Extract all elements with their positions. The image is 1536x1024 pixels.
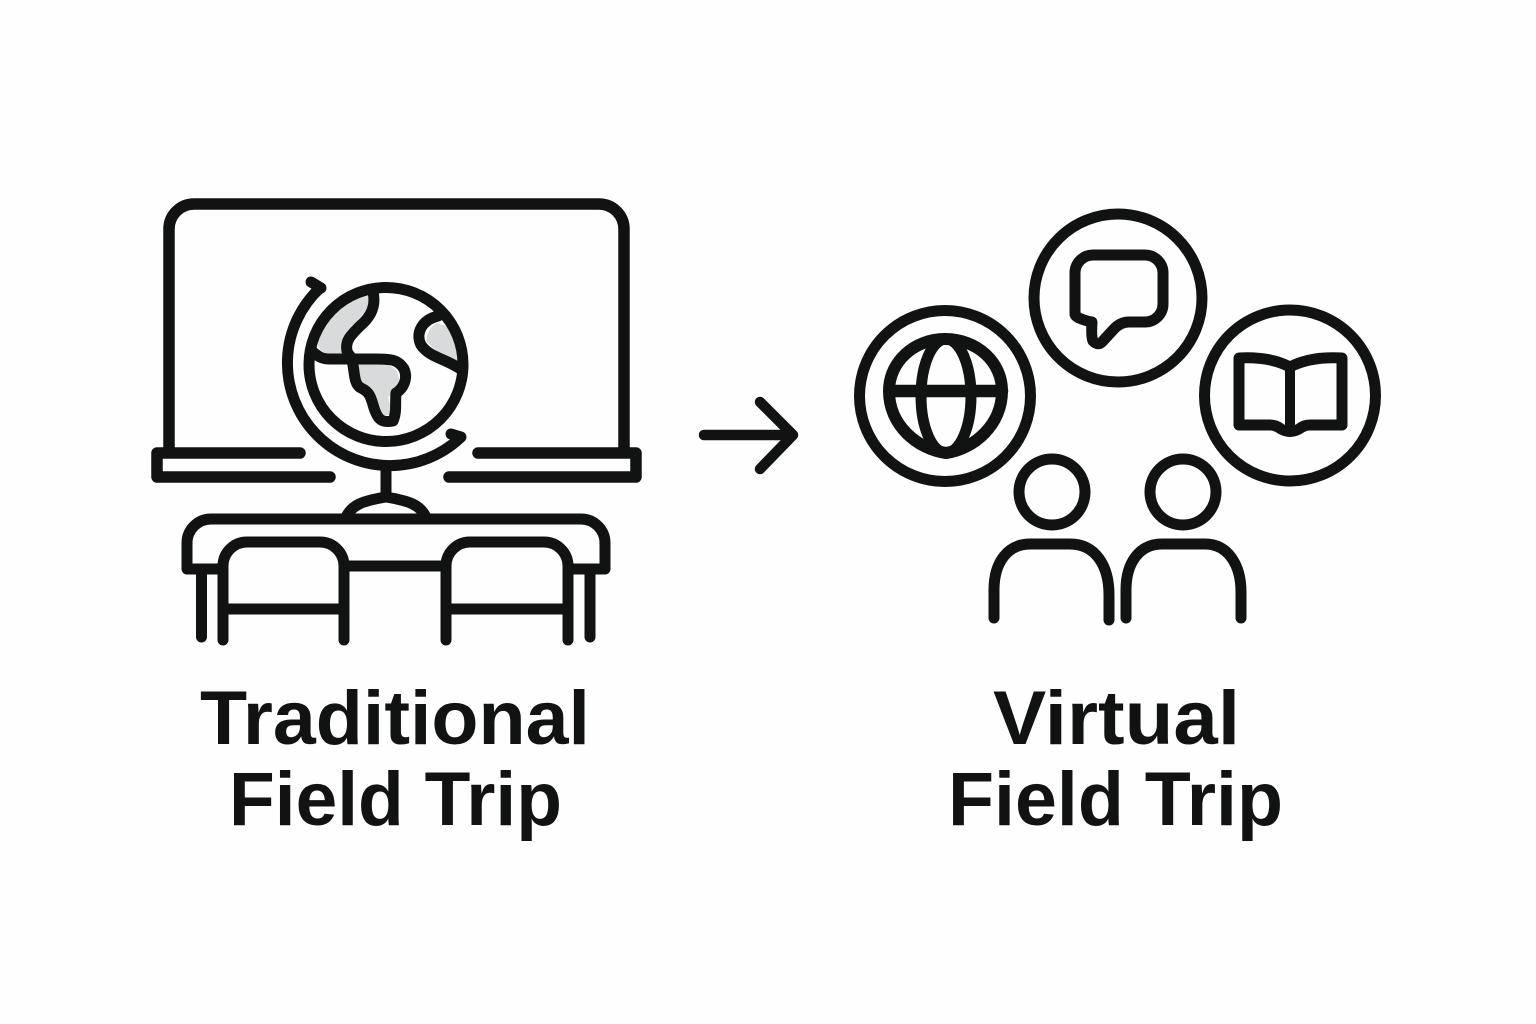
heading: virtual field trip bbox=[948, 676, 1283, 842]
icon: speech bubble in circle bbox=[1034, 214, 1202, 382]
person right bbox=[1126, 459, 1241, 618]
panel: traditional field trip bbox=[157, 204, 636, 842]
globe stand arc bbox=[287, 282, 461, 466]
person left bbox=[994, 459, 1109, 620]
heading: virtual field trip: Field Trip bbox=[948, 757, 1283, 842]
heading: virtual field trip: Virtual bbox=[993, 676, 1240, 761]
globe sphere and outlines bbox=[309, 288, 463, 442]
icon: globe in circle bbox=[860, 310, 1030, 482]
heading: traditional field trip bbox=[200, 676, 590, 842]
panel: virtual field trip bbox=[860, 214, 1376, 842]
heading: traditional field trip: Traditional bbox=[200, 676, 590, 761]
icon: classroom board bbox=[157, 204, 636, 477]
arrow bbox=[704, 402, 793, 469]
globe stem and base bbox=[346, 470, 426, 517]
icon: two people bbox=[994, 459, 1241, 620]
heading: traditional field trip: Field Trip bbox=[229, 757, 562, 842]
icon: open book in circle bbox=[1204, 310, 1376, 481]
icon: globe bbox=[287, 282, 463, 517]
globe continents bbox=[318, 296, 460, 415]
icon: desk and chairs bbox=[187, 519, 605, 640]
